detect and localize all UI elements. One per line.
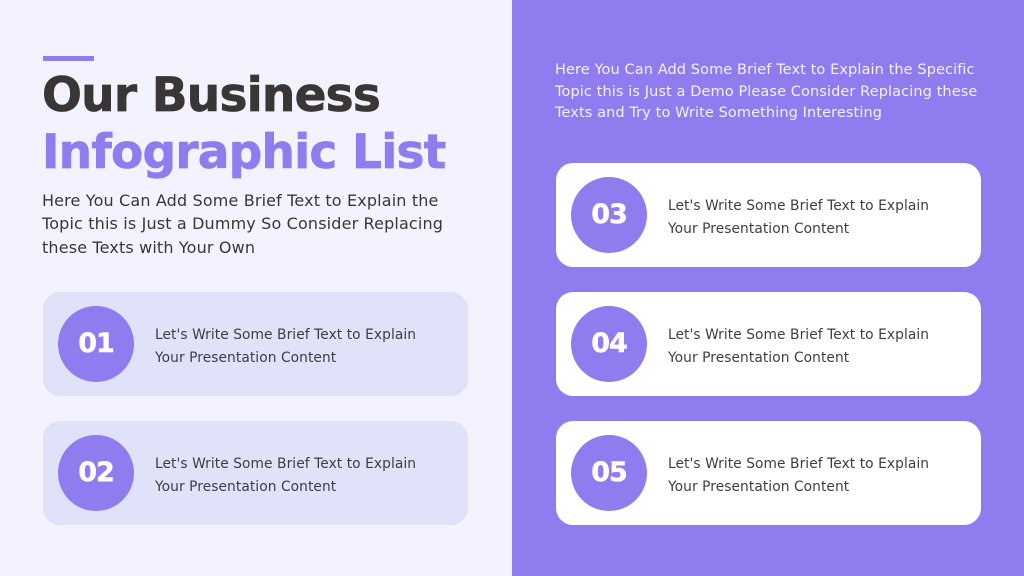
card 01 text: Let's Write Some Brief Text to Explain — [155, 327, 416, 343]
card 04 — [556, 292, 981, 396]
right purple panel — [512, 0, 1024, 576]
title line 2: Infographic List — [42, 125, 445, 180]
card 02 text: Let's Write Some Brief Text to Explain — [155, 456, 416, 472]
left intro text — [42, 191, 443, 257]
card 05 text: Let's Write Some Brief Text to Explain — [668, 456, 929, 472]
card 03 text: Your Presentation Content — [668, 221, 849, 237]
card 04 text: Your Presentation Content — [668, 350, 849, 366]
accent bar — [43, 56, 94, 61]
number 05 — [571, 435, 647, 511]
number 02 — [58, 435, 134, 511]
card 05 text: Your Presentation Content — [668, 479, 849, 495]
card 02 text: Your Presentation Content — [155, 479, 336, 495]
number 04: 04 — [591, 328, 627, 359]
right intro text — [554, 62, 977, 121]
card 02 text — [155, 456, 416, 495]
card 05 text — [668, 456, 929, 495]
card 03 — [556, 163, 981, 267]
right intro text: Topic this is Just a Demo Please Consider Replacing these — [555, 84, 977, 100]
right intro text: Texts and Try to Write Something Interesting — [555, 105, 882, 121]
card 02 — [43, 421, 468, 525]
left intro text: these Texts with Your Own — [42, 238, 255, 257]
title line 1: Our Business — [42, 68, 380, 123]
card 05 — [556, 421, 981, 525]
number 01 — [58, 306, 134, 382]
number 03: 03 — [591, 199, 627, 230]
number 04 — [571, 306, 647, 382]
number 01: 01 — [78, 328, 114, 359]
card 04 text: Let's Write Some Brief Text to Explain — [668, 327, 929, 343]
number 02: 02 — [78, 457, 114, 488]
card 04 text — [668, 327, 929, 366]
card 01 text: Your Presentation Content — [155, 350, 336, 366]
title — [42, 68, 446, 180]
card 03 text — [668, 198, 929, 237]
card 01 — [43, 292, 468, 396]
number 05: 05 — [591, 457, 627, 488]
card 03 text: Let's Write Some Brief Text to Explain — [668, 198, 929, 214]
number 03 — [571, 177, 647, 253]
left intro text: Here You Can Add Some Brief Text to Explain the — [42, 191, 439, 210]
left intro text: Topic this is Just a Dummy So Consider Replacing — [42, 214, 443, 233]
right intro text: Here You Can Add Some Brief Text to Explain the Specific — [555, 62, 975, 78]
card 01 text — [155, 327, 416, 366]
